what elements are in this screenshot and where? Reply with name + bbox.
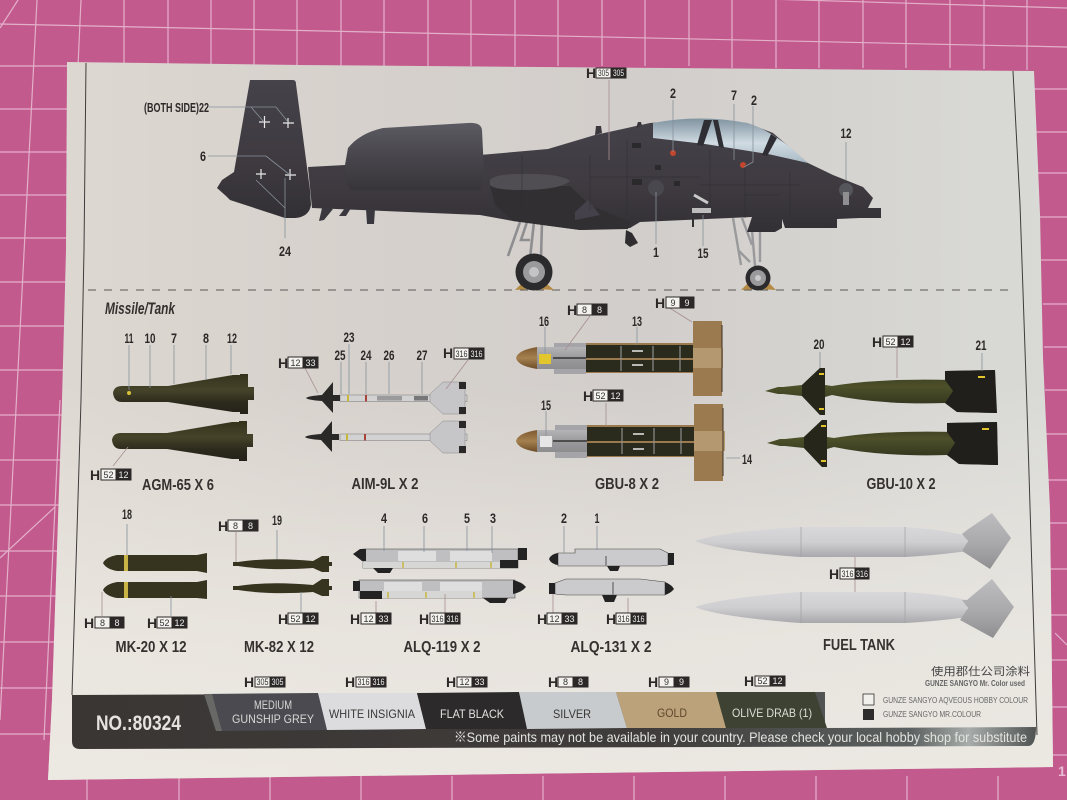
labels: 20 [814,336,825,352]
paint brand legend: GUNZE SANGYO AQVEOUS HOBBY COLOUR [883,696,1028,705]
badge [583,388,623,404]
badge: H [147,615,157,631]
cutting mat background: 1 [1058,763,1066,779]
bomb upper [103,553,207,573]
badge: H [537,611,547,627]
badge: 316: H [345,674,355,690]
badge: 9 9: 9 [664,677,669,687]
MK-82 group [218,512,332,656]
badge: 52 [885,337,896,347]
badge: 52 [159,618,170,628]
title: GBU-8 X 2 [595,476,659,493]
labels: 11 [124,330,134,346]
badge [537,611,577,627]
aircraft callout labels: 1 [653,244,659,260]
badge: 8 [233,521,238,531]
aircraft callout labels: (BOTH SIDE)22 [144,100,209,115]
colour code badges row [244,673,785,690]
labels [334,329,428,363]
missile lower [112,421,253,461]
labels [381,510,496,526]
labels: 26 [384,347,395,363]
labels: 12 [227,330,237,346]
labels: 16 [539,313,549,329]
labels: 15 [541,397,551,413]
under-fuselage fins [319,208,375,224]
badge: 33 [305,358,316,368]
title: ALQ-119 X 2 [404,639,481,656]
ALQ-119 group [350,510,527,656]
badge [443,345,484,361]
title: AIM-9L X 2 [352,476,419,493]
swatch: medium gunship grey [204,693,327,731]
pod lower [549,579,674,602]
aircraft illustration [144,65,881,290]
paint brand legend: GUNZE SANGYO MR.COLOUR [883,710,981,719]
badge: 305: H [244,674,254,690]
badge: 12 [900,337,911,347]
labels: 7 [171,330,177,346]
swatch: olive drab [716,692,827,728]
labels: 23 [344,329,355,345]
bomb upper [516,321,723,396]
GBU-10 group [765,334,998,493]
badge: H [567,302,577,318]
product number: NO.:80324 [96,712,181,735]
badge: 316 [470,349,482,359]
labels: 10 [144,330,156,346]
badge: H [872,334,882,350]
badge: 52 [103,470,114,480]
badge: H [84,615,94,631]
insignia crosses [256,116,296,180]
MK-20 group [84,506,207,656]
ALQ-131 group [537,510,674,656]
badge [872,334,913,350]
aircraft callout labels: 6 [200,148,206,164]
labels: 5 [464,510,470,526]
badge: 8 [582,305,587,315]
swatch: flat black [417,692,527,729]
badge: 9 [670,298,676,308]
badge: 316: 316 [358,677,370,687]
labels: 13 [632,313,642,329]
colour badge H305: 305 [598,68,609,78]
badge: 8 8: H [548,674,558,690]
GBU-8 group [516,295,752,493]
missile upper [113,374,254,414]
paint brand legend [863,663,1030,720]
AGM-65 group [90,330,254,494]
badge: 12 33 [446,674,487,690]
tank lower [695,579,1014,638]
aircraft callout labels [144,85,852,261]
badge: 316 [432,614,444,624]
labels: 1 [594,510,600,526]
aircraft callout labels: 24 [279,243,291,259]
swatch: silver [519,692,627,729]
badge: 316 [842,569,854,579]
badge: 33 [564,614,575,624]
badge [90,467,131,483]
badge [218,518,258,534]
pod upper [549,549,674,571]
label: 18 [122,506,132,522]
badge [655,295,694,311]
engine nacelle [345,123,484,190]
labels: 25 [334,347,346,363]
badge: H [606,611,616,627]
badge: 305: 305 [256,677,268,687]
swatch: medium gunship grey: GUNSHIP GREY [232,712,314,726]
badge: 316 [632,614,644,624]
badge: 52 12 [744,673,785,689]
badge: 12 [363,614,374,624]
missile lower [305,421,467,453]
badge: H [278,611,288,627]
swatch: silver: SILVER [553,707,591,721]
badge: 9 9: 9 [679,677,684,687]
aircraft callout labels: 12 [840,125,852,141]
bomb lower [233,579,332,596]
badge: 12 33: 33 [474,677,485,687]
tank upper [695,513,1011,569]
badge: H [583,388,593,404]
badge: 12 [118,470,129,480]
swatch: medium gunship grey: MEDIUM [254,698,292,712]
badge: H [419,611,429,627]
badge: 8 8 [548,674,588,690]
swatch: flat black: FLAT BLACK [440,707,504,721]
panel details [522,140,800,218]
labels [561,510,600,526]
antenna and dorsal [595,122,642,135]
badge: 305 [244,674,285,690]
wing and pod [490,186,630,230]
labels: 27 [416,347,428,363]
badge: 52 [290,614,301,624]
title: GBU-10 X 2 [866,476,936,493]
badge: 12 [290,358,301,368]
badge: 52 12: 12 [772,676,783,686]
title: MK-20 X 12 [116,639,187,656]
badge: H [278,355,288,371]
badge: 8 [597,305,602,315]
red markers [670,150,676,156]
swatch: olive drab: OLIVE DRAB (1) [732,706,812,720]
fuselage [308,119,881,232]
labels: 3 [490,510,496,526]
aircraft leader lines [208,100,846,246]
badge [419,611,460,627]
colour badge H305: 305 [613,68,624,78]
swatch: gold: GOLD [657,706,687,720]
labels: 21 [976,337,987,353]
colour chart strip [72,692,1036,749]
missile upper [306,382,467,414]
tail fin [217,80,311,218]
AIM-9L group [278,329,484,493]
badge: 12 33: 12 [459,677,470,687]
bomb lower [103,580,207,599]
badge: 52 12: 52 [757,676,768,686]
aircraft callout labels: 2 [670,85,676,101]
labels: 6 [422,510,428,526]
badge: 12 [174,618,185,628]
badge: 52 [595,391,606,401]
badge: 12 [305,614,316,624]
badge [147,615,187,631]
pod upper [353,548,527,573]
landing gear [508,218,776,290]
badge [278,611,318,627]
swatch: white insignia [318,693,426,730]
title: AGM-65 X 6 [142,477,214,494]
heading: Missile/Tank: Missile/Tank [105,299,176,318]
bomb lower [516,404,725,481]
labels: 14 [742,451,752,467]
aircraft callout labels: 15 [698,245,709,261]
labels [539,313,752,467]
badge: H [829,566,839,582]
badge: 12 [610,391,621,401]
badge: 8 8: 8 [578,677,583,687]
bomb lower [767,420,998,467]
badge: 33 [378,614,389,624]
badge: 316 [345,674,386,690]
swatch: white insignia: WHITE INSIGNIA [329,707,415,721]
bomb upper [233,556,332,572]
badge: 9 [684,298,690,308]
colour badge H305: H [586,65,596,81]
labels: 2 [561,510,567,526]
bomb upper [765,368,997,415]
title: MK-82 X 12 [244,639,314,656]
labels: 24 [360,347,372,363]
swatch: gold [616,692,726,728]
badge: 316 [856,569,868,579]
fuel tank group [695,513,1014,654]
pod lower [353,580,526,603]
aircraft callout labels: 2 [751,92,757,108]
badge: 8 8: 8 [563,677,568,687]
labels [814,336,987,353]
badge [606,611,646,627]
badge: H [218,518,228,534]
dark band [72,692,1036,749]
badge: H [350,611,360,627]
labels [124,330,237,346]
badge: H [90,467,100,483]
title: FUEL TANK [823,637,895,654]
paint brand legend: GUNZE SANGYO Mr. Color used [925,679,1025,688]
badge: 316 [446,614,458,624]
badge: 9 9: H [648,674,658,690]
labels: 4 [381,510,387,526]
labels: 8 [203,330,209,346]
canopy [653,118,808,163]
badge [567,302,607,318]
badge: 316 [456,349,468,359]
badge: 8 [248,521,253,531]
badge [278,355,318,371]
badge: 8 [100,618,105,628]
badge: H [443,345,453,361]
colour badge H305 [586,65,626,81]
badge: 9 9 [648,674,689,690]
badge [84,615,124,631]
badge [829,566,869,582]
paint brand legend: 使用郡仕公司涂料 [931,663,1030,679]
aircraft callout labels: 7 [731,87,737,103]
badge: 12 [549,614,560,624]
badge: H [655,295,665,311]
badge: 8 [114,618,120,628]
badge: 12 33: H [446,674,456,690]
badge [350,611,391,627]
badge: 305: 305 [272,677,284,687]
label: 19 [272,512,282,528]
title: ALQ-131 X 2 [570,639,652,656]
badge: 52 12: H [744,673,754,689]
badge: 316 [618,614,630,624]
badge: 316: 316 [372,677,384,687]
